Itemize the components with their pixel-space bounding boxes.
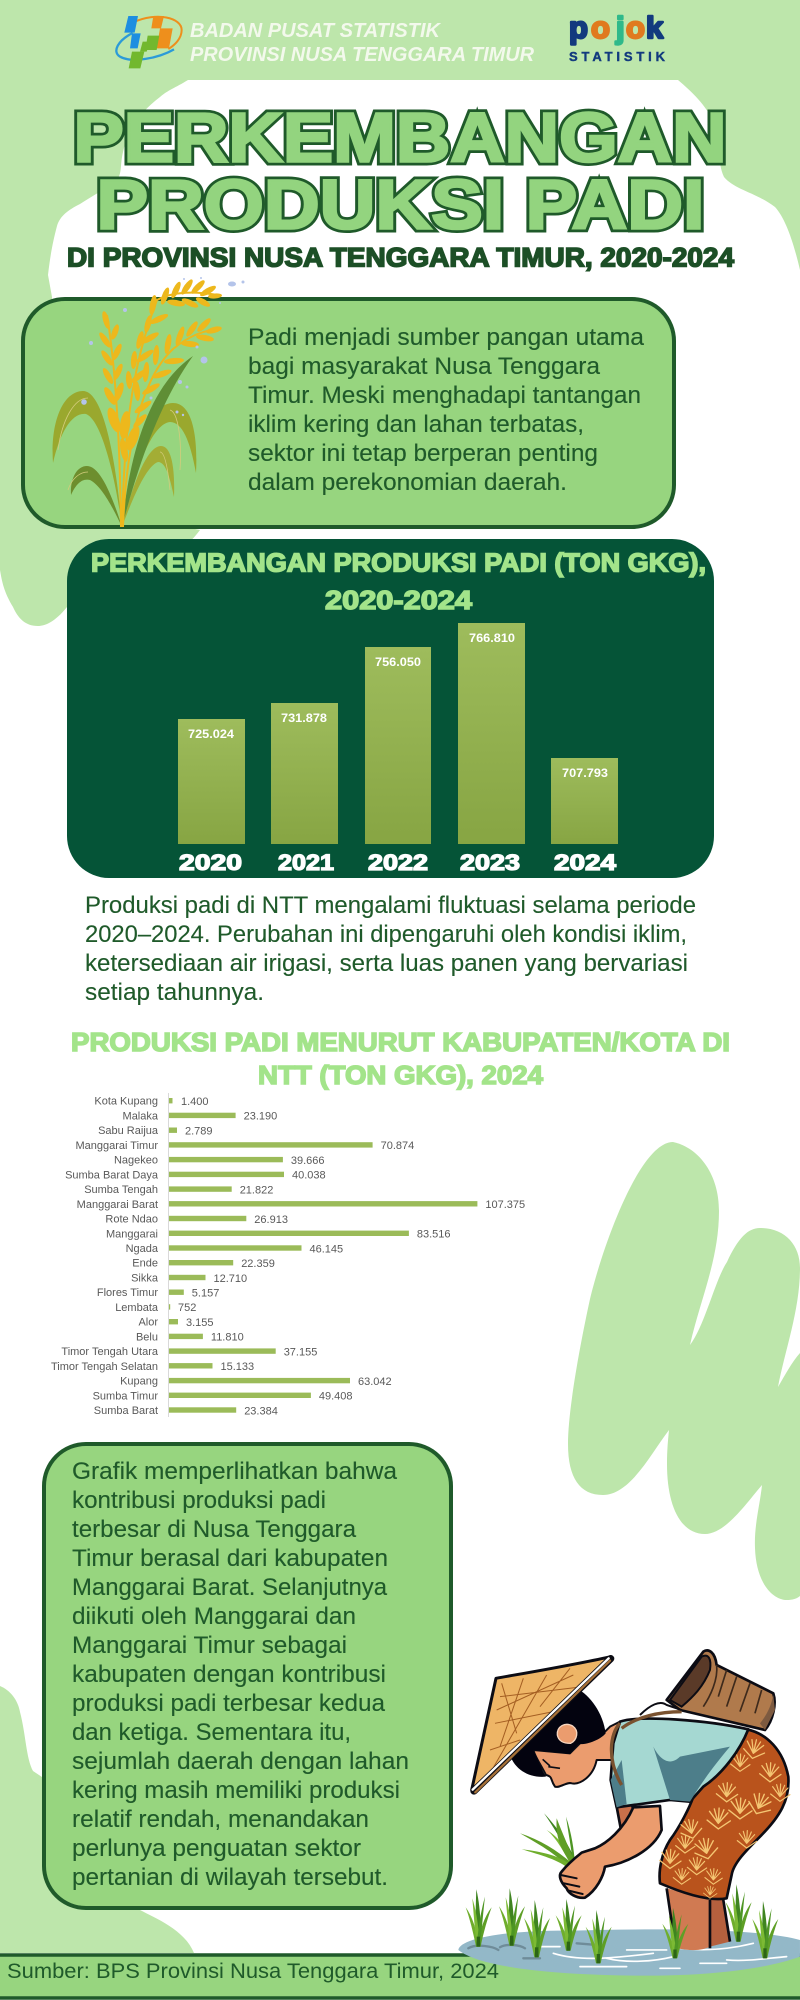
year labels: 2020 [179,850,242,875]
text block: trend explanation: Produksi padi di NTT mengalami fluktuasi selama periode [85,892,696,919]
district labels: Alor [138,1317,158,1329]
panel: analysis [44,1444,451,1908]
district labels: Kota Kupang [94,1096,158,1108]
analysis text: pertanian di wilayah tersebut. [72,1864,388,1891]
seedlings in hand [520,1813,575,1870]
analysis text: terbesar di Nusa Tenggara [72,1516,357,1543]
header: agency name: PROVINSI NUSA TENGGARA TIMUR [190,44,535,66]
intro text: iklim kering dan lahan terbatas, [248,411,584,438]
title line 1: PERKEMBANGAN [74,98,726,176]
year labels: 2023 [460,850,520,875]
panel: intro [23,299,674,527]
bars [178,623,618,844]
district values: 22.359 [241,1258,275,1270]
pants with batik pattern [660,1729,790,1899]
header: pojok statistik logo: o [626,10,645,45]
district labels: Rote Ndao [105,1214,158,1226]
district values: 12.710 [214,1273,247,1285]
intro text: Timur. Meski menghadapi tantangan [248,382,641,409]
district values: 1.400 [181,1096,209,1108]
analysis text: Manggarai Timur sebagai [72,1632,347,1659]
district labels: Lembata [115,1302,159,1314]
horizontal bar chart: districts [51,1093,525,1417]
chart heading [91,548,706,615]
bar values: 766.810 [469,631,515,645]
header: pojok statistik logo [569,10,666,64]
district values: 15.133 [220,1361,254,1373]
analysis text: relatif rendah, menandakan [72,1806,369,1833]
text block: trend explanation [85,892,696,1006]
heading: district chart [71,1027,730,1090]
header: pojok statistik logo: STATISTIK [569,49,666,64]
district labels: Nagekeo [114,1155,158,1167]
water pond [458,1929,800,1976]
source bar [0,1955,800,1998]
district labels [51,1096,159,1417]
analysis text: Grafik memperlihatkan bahwa [72,1458,398,1485]
droplets [81,277,244,416]
district labels: Belu [136,1331,158,1343]
title line 2: PRODUKSI PADI [96,166,705,244]
district values: 46.145 [310,1243,343,1255]
icon: rice plant [53,277,245,527]
seedlings behind farmer [726,1884,752,1942]
analysis text: kontribusi produksi padi [72,1487,326,1514]
subtitle: DI PROVINSI NUSA TENGGARA TIMUR, 2020-2024 [67,242,734,272]
district values: 23.190 [244,1111,277,1123]
district values: 5.157 [192,1288,219,1300]
analysis text: Timur berasal dari kabupaten [72,1545,388,1572]
district labels: Manggarai Barat [77,1199,158,1211]
background blob: bottom left [0,1686,194,1953]
front arm and hand [560,1806,662,1898]
text block: trend explanation: setiap tahunnya. [85,979,264,1006]
year labels: 2022 [368,850,428,875]
header: pojok statistik logo: j [615,10,625,45]
title [67,98,734,272]
district values: 70.874 [381,1140,414,1152]
source text: Sumber: BPS Provinsi Nusa Tenggara Timur, 2024 [7,1960,499,1983]
district labels: Sumba Barat [94,1405,158,1417]
illustration: farmer planting rice [458,1650,800,1976]
basket [667,1650,775,1730]
shirt [611,1703,748,1807]
district values: 40.038 [292,1170,326,1182]
title line 2: PRODUKSI PADI [96,166,705,244]
analysis text [72,1458,409,1891]
district labels: Sumba Barat Daya [65,1169,159,1181]
district labels: Sikka [131,1272,159,1284]
district labels: Malaka [123,1110,159,1122]
year labels: 2021 [278,850,334,875]
back arm [617,1803,637,1833]
header: pojok statistik logo: o [591,10,610,45]
heading: district chart: NTT (TON GKG), 2024 [258,1060,544,1090]
seedlings in water [466,1888,778,1963]
district values: 21.822 [240,1184,273,1196]
hair and ear [510,1688,606,1777]
background blob: right scribble [568,1142,800,1600]
district values: 26.913 [254,1214,288,1226]
analysis text: Manggarai Barat. Selanjutnya [72,1574,388,1601]
panel: bar chart 2020-2024 [67,539,714,878]
intro text: bagi masyarakat Nusa Tenggara [248,353,601,380]
district values: 37.155 [284,1346,317,1358]
district labels: Timor Tengah Utara [61,1346,159,1358]
legs [667,1888,730,1950]
year labels [179,850,617,875]
bar values: 731.878 [281,711,327,725]
analysis text: dan ketiga. Sementara itu, [72,1719,351,1746]
district values: 3.155 [186,1317,214,1329]
district labels: Ngada [126,1243,159,1255]
district values [178,1096,525,1417]
district labels: Kupang [120,1376,158,1388]
conical hat [472,1657,611,1792]
intro text: dalam perekonomian daerah. [248,469,567,496]
district values: 2.789 [185,1126,213,1138]
text block: trend explanation: ketersediaan air irigasi, serta luas panen yang bervariasi [85,950,688,977]
year labels: 2024 [554,850,617,875]
district labels: Sabu Raijua [98,1125,159,1137]
district labels: Sumba Tengah [84,1184,158,1196]
analysis text: kering masih memiliki produksi [72,1777,400,1804]
intro text [248,324,645,496]
analysis text: diikuti oleh Manggarai dan [72,1603,356,1630]
district values: 107.375 [485,1199,525,1211]
title line 1: PERKEMBANGAN [74,98,726,176]
chart heading: PERKEMBANGAN PRODUKSI PADI (TON GKG), [91,548,706,578]
intro text: sektor ini tetap berperan penting [248,440,598,467]
analysis text: perlunya penguatan sektor [72,1835,361,1862]
header: pojok statistik logo: p [569,10,588,45]
district values: 752 [178,1302,196,1314]
analysis text: sejumlah daerah dengan lahan [72,1748,409,1775]
text block: trend explanation: 2020–2024. Perubahan ini dipengaruhi oleh kondisi iklim, [85,921,687,948]
header: pojok statistik logo: k [646,10,664,45]
chart heading: 2020-2024 [325,585,473,615]
heading: district chart: PRODUKSI PADI MENURUT KABUPATEN/KOTA DI [71,1027,730,1057]
district values: 23.384 [244,1405,278,1417]
header: agency name: BADAN PUSAT STATISTIK [190,20,442,42]
intro text: Padi menjadi sumber pangan utama [248,324,645,351]
district labels: Manggarai [106,1228,158,1240]
district values: 49.408 [319,1391,353,1403]
district values: 11.810 [211,1332,244,1344]
district labels: Ende [132,1258,158,1270]
header: BPS logo [116,16,182,68]
neck and face [533,1722,620,1787]
header: agency name [190,20,535,66]
district bars [169,1098,477,1413]
panicles [97,278,223,527]
analysis text: kabupaten dengan kontribusi [72,1661,386,1688]
district labels: Manggarai Timur [75,1140,158,1152]
district labels: Sumba Timur [93,1390,158,1402]
bar values: 707.793 [562,766,608,780]
bar values [188,631,608,780]
background blob: top and left [0,0,800,626]
analysis text: produksi padi terbesar kedua [72,1690,386,1717]
bar values: 756.050 [375,655,421,669]
bar values: 725.024 [188,727,234,741]
district labels: Timor Tengah Selatan [51,1361,158,1373]
district values: 83.516 [417,1229,451,1241]
district values: 39.666 [291,1155,325,1167]
district values: 63.042 [358,1376,392,1388]
leaves [53,356,196,527]
district labels: Flores Timur [97,1287,158,1299]
